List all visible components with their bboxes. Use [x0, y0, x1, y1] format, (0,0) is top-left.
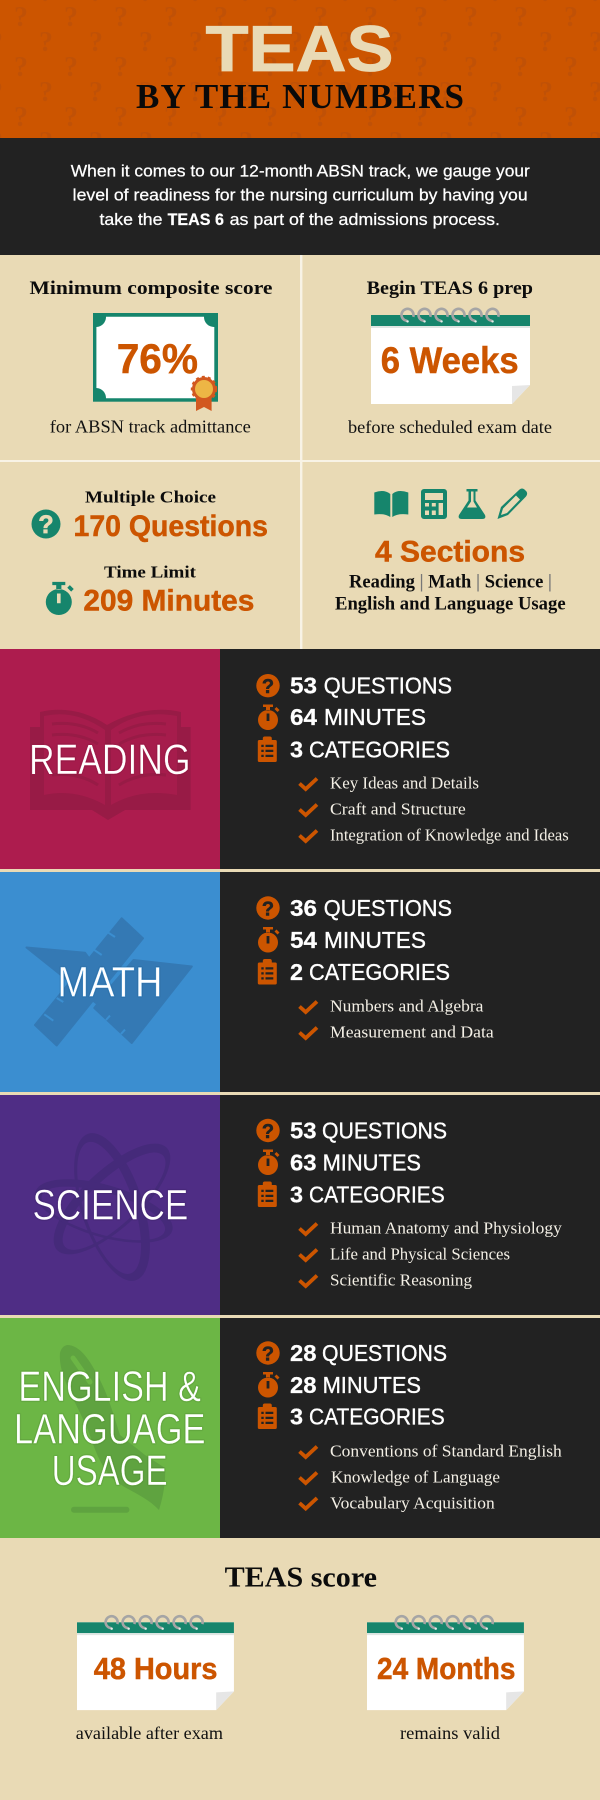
- header banner: [0, 0, 600, 138]
- category list: Vocabulary Acquisition: [330, 1493, 495, 1512]
- icon: rulers watermark: [26, 918, 192, 1046]
- stats: 28: [290, 1372, 317, 1398]
- number: 76%: 76%: [117, 335, 198, 382]
- icon: calendar 24 months: [367, 1616, 524, 1710]
- icon: atom watermark: [29, 1124, 187, 1290]
- stats: QUESTIONS: [324, 895, 452, 921]
- panel: begin prep: [348, 279, 552, 437]
- panel: four sections: [335, 488, 566, 614]
- intro panel: [0, 138, 600, 255]
- stats: CATEGORIES: [309, 736, 450, 762]
- panel: science: [0, 1095, 600, 1315]
- category list: Integration of Knowledge and Ideas: [330, 826, 569, 845]
- stats: 3: [290, 1404, 303, 1430]
- stats: MINUTES: [323, 1150, 421, 1176]
- caption: remains valid: [400, 1723, 500, 1743]
- category list: Measurement and Data: [330, 1023, 494, 1042]
- subtitle: BY THE NUMBERS: [136, 77, 464, 116]
- stats: CATEGORIES: [309, 959, 450, 985]
- panel: math: [0, 872, 600, 1092]
- stats: QUESTIONS: [324, 672, 452, 698]
- stats: MINUTES: [323, 1372, 421, 1398]
- caption: for ABSN track admittance: [50, 417, 251, 437]
- number: 4 sections: 4 Sections: [375, 536, 525, 569]
- icon: calculator: [421, 489, 447, 519]
- panel: english and language usage: [0, 1318, 600, 1538]
- section label: [14, 1363, 206, 1495]
- intro text: TEAS 6: [168, 210, 224, 229]
- stats: ?: [262, 898, 274, 920]
- panel: questions and time: [32, 488, 268, 618]
- category list: [300, 997, 494, 1042]
- section label: MATH: [57, 959, 163, 1007]
- stats: [256, 895, 452, 985]
- heading: TEAS score: [225, 1562, 377, 1594]
- stats: [256, 672, 452, 762]
- section label: LANGUAGE: [14, 1405, 206, 1453]
- section label: READING: [29, 736, 191, 784]
- title: TEAS: TEAS: [206, 12, 394, 85]
- category list: Key Ideas and Details: [330, 773, 479, 792]
- icon: calendar 48 hours: [77, 1616, 234, 1710]
- section names: [335, 573, 566, 614]
- stats: 28: [290, 1340, 317, 1366]
- stats: QUESTIONS: [322, 1340, 447, 1366]
- stats: 64: [290, 704, 317, 730]
- category list: Numbers and Algebra: [330, 997, 484, 1016]
- stats: ?: [262, 1121, 274, 1143]
- section names: Reading | Math | Science |: [349, 573, 552, 593]
- stats: ?: [262, 676, 274, 698]
- stats: MINUTES: [324, 927, 426, 953]
- category list: Knowledge of Language: [331, 1468, 500, 1487]
- icon: pencil: [498, 488, 527, 519]
- section names: English and Language Usage: [335, 594, 566, 614]
- category list: Life and Physical Sciences: [330, 1244, 510, 1263]
- category list: [300, 773, 569, 845]
- caption: available after exam: [76, 1723, 223, 1743]
- intro text: as part of the admissions process.: [230, 210, 500, 229]
- stats: MINUTES: [324, 704, 426, 730]
- label: multiple choice: Multiple Choice: [85, 488, 216, 507]
- number: 6 weeks: 6 Weeks: [381, 340, 519, 381]
- section label: ENGLISH &: [18, 1363, 201, 1411]
- icon: question mark: [32, 510, 60, 539]
- icon: stopwatch: [46, 582, 74, 615]
- stats: [256, 1340, 447, 1430]
- heading: Begin TEAS 6 prep: [367, 279, 533, 299]
- category list: [300, 1442, 562, 1512]
- stats: 2: [290, 959, 303, 985]
- stats: [256, 1118, 447, 1208]
- stats: 3: [290, 736, 303, 762]
- stats: 3: [290, 1182, 303, 1208]
- section label: USAGE: [52, 1447, 168, 1495]
- caption: before scheduled exam date: [348, 417, 552, 437]
- stats: 36: [290, 895, 317, 921]
- icon: book: [374, 491, 408, 517]
- intro text: level of readiness for the nursing curriculum by having you: [73, 186, 528, 205]
- icon: quill watermark: [60, 1345, 165, 1513]
- stats: QUESTIONS: [322, 1118, 447, 1144]
- icon: open book watermark: [30, 710, 191, 820]
- icon: question mark: ?: [38, 511, 54, 539]
- icon: calendar: [371, 309, 530, 404]
- number: 170 questions: 170 Questions: [74, 510, 268, 543]
- stats: ?: [262, 1343, 274, 1365]
- panel: reading: [0, 649, 600, 869]
- number: 48 hours: 48 Hours: [94, 1651, 217, 1686]
- label: time limit: Time Limit: [104, 562, 196, 581]
- stats: CATEGORIES: [309, 1182, 445, 1208]
- heading: Minimum composite score: [30, 279, 272, 299]
- stats: 53: [290, 1118, 316, 1144]
- stats: 63: [290, 1150, 316, 1176]
- category list: Human Anatomy and Physiology: [330, 1218, 562, 1237]
- intro text: [71, 162, 530, 229]
- category list: Scientific Reasoning: [330, 1271, 472, 1290]
- category list: Craft and Structure: [330, 800, 466, 819]
- intro text: take the: [100, 210, 162, 229]
- section label: SCIENCE: [32, 1181, 188, 1229]
- icon: flask: [459, 489, 485, 519]
- stats: 53: [290, 672, 317, 698]
- number: 24 months: 24 Months: [377, 1651, 516, 1686]
- panel: minimum composite score: [30, 279, 272, 437]
- panel: TEAS score: [76, 1562, 524, 1743]
- category list: Conventions of Standard English: [330, 1442, 562, 1461]
- number: 209 minutes: 209 Minutes: [83, 585, 254, 618]
- intro text: When it comes to our 12-month ABSN track, we gauge your: [71, 162, 530, 181]
- stats: CATEGORIES: [309, 1404, 445, 1430]
- icon: certificate: [93, 313, 218, 411]
- stats: 54: [290, 927, 317, 953]
- category list: [300, 1218, 562, 1290]
